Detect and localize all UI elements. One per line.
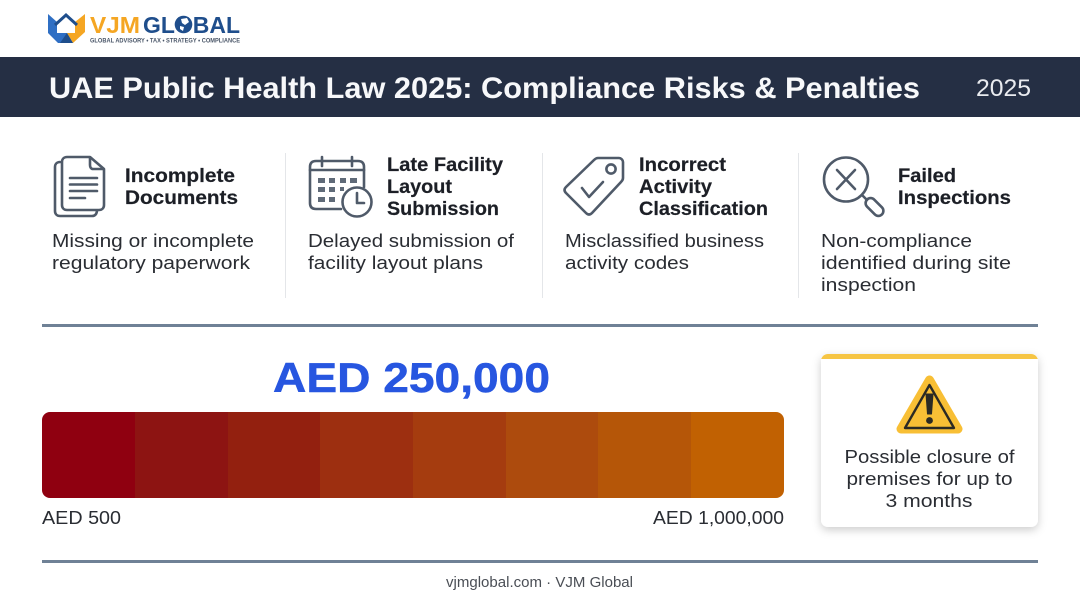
heading <box>639 154 768 220</box>
logo: VJM Global: GLOBAL <box>143 12 240 38</box>
logo tagline: GLOBAL ADVISORY • TAX • STRATEGY • COMPLIANCE <box>90 39 240 45</box>
icon: calendar with clock <box>310 157 372 216</box>
description: facility layout plans <box>308 252 483 273</box>
footer: vjmglobal.com · VJM Global <box>446 575 633 591</box>
description: inspection <box>821 274 916 295</box>
panel: incorrect activity classification <box>564 154 768 273</box>
heading: Documents <box>125 187 238 209</box>
description: Non-compliance <box>821 230 972 251</box>
description <box>565 230 764 273</box>
heading: Submission <box>387 198 499 220</box>
description <box>52 230 254 273</box>
icon: documents <box>55 157 104 216</box>
heading <box>125 165 238 209</box>
icon: calendar date squares <box>318 178 357 202</box>
description <box>821 230 1011 295</box>
panel: failed inspections <box>821 158 1011 295</box>
title: UAE Public Health Law 2025: Compliance Risks & Penalties <box>49 72 920 105</box>
heading: Activity <box>639 176 712 198</box>
fine amount headline: AED 250,000 <box>273 354 550 401</box>
callout text: 3 months <box>886 490 972 511</box>
icon: tag with check <box>564 158 623 214</box>
panel: late facility layout submission <box>308 154 515 273</box>
heading: Layout <box>387 176 453 198</box>
description: Missing or incomplete <box>52 230 254 251</box>
description: activity codes <box>565 252 689 273</box>
callout: closure warning <box>821 354 1038 527</box>
logo: VJM Global <box>48 12 240 45</box>
heading: Classification <box>639 198 768 220</box>
description: identified during site <box>821 252 1011 273</box>
heading: Late Facility <box>387 154 503 176</box>
callout text: premises for up to <box>846 468 1012 489</box>
description <box>308 230 515 273</box>
logo wordmark: VJM <box>90 12 140 38</box>
icon: warning triangle <box>901 380 958 429</box>
description: Delayed submission of <box>308 230 515 251</box>
title banner <box>0 57 1080 117</box>
icon: magnifier with cross <box>824 158 885 218</box>
heading <box>387 154 503 220</box>
heading: Incorrect <box>639 154 727 176</box>
heading: Inspections <box>898 187 1011 209</box>
year: 2025 <box>976 75 1031 102</box>
description: Misclassified business <box>565 230 764 251</box>
panel: incomplete documents <box>52 157 254 273</box>
penalty range bar <box>42 412 784 498</box>
heading: Failed <box>898 165 956 187</box>
description: regulatory paperwork <box>52 252 251 273</box>
logo mark <box>48 14 85 43</box>
heading <box>898 165 1011 209</box>
callout text: Possible closure of <box>844 446 1015 467</box>
range maximum label: AED 1,000,000 <box>653 508 784 528</box>
heading: Incomplete <box>125 165 235 187</box>
callout text <box>844 446 1015 511</box>
logo globe letter <box>175 16 192 33</box>
range minimum label: AED 500 <box>42 508 121 528</box>
